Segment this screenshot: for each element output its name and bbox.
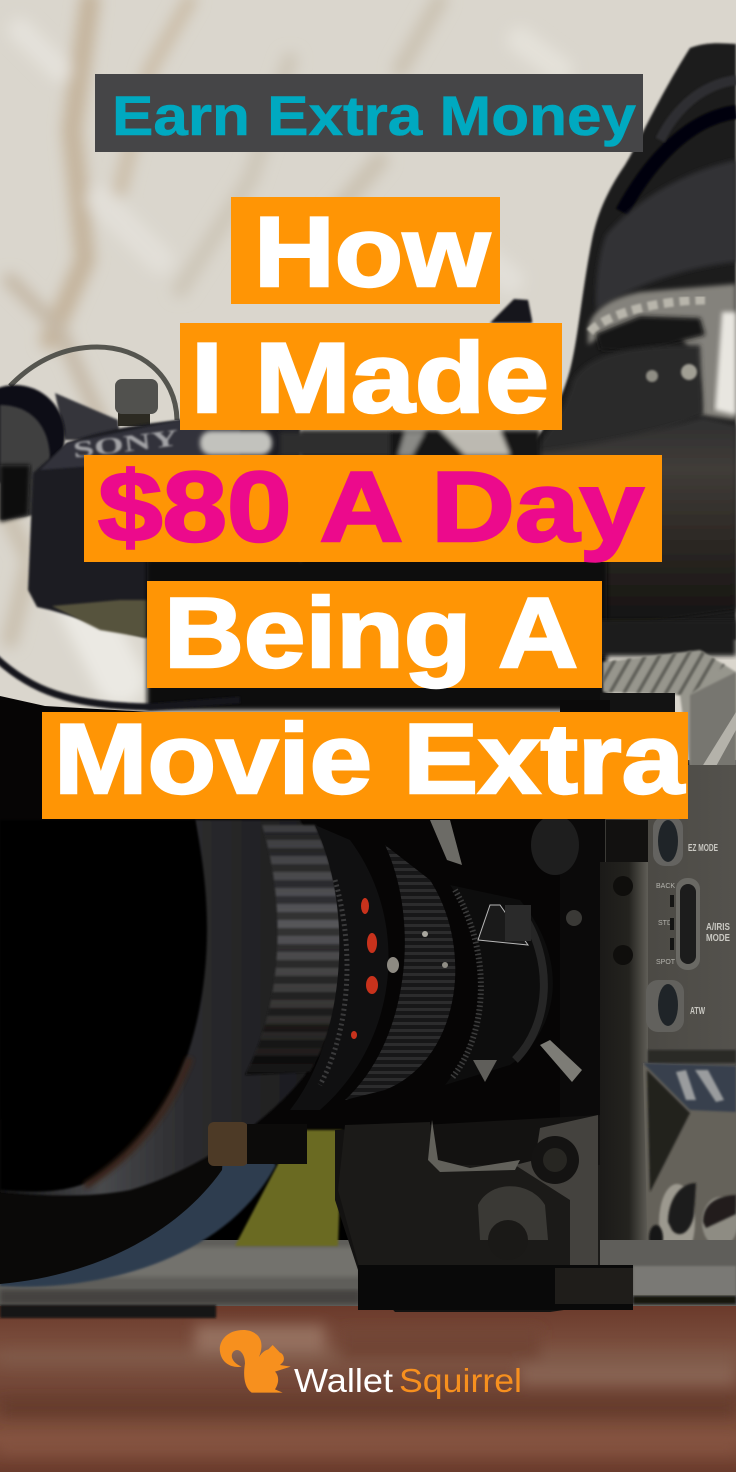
olive background patch [235, 1130, 342, 1246]
wordmark: Wallet [294, 1362, 393, 1399]
main lens assembly [0, 815, 582, 1196]
cable loop [10, 347, 177, 420]
collar shadow and dark housing [530, 345, 703, 455]
blurred wall backdrop [0, 0, 736, 760]
switch labels: SPOT L [656, 959, 681, 966]
blue camera bag curve [0, 1140, 276, 1287]
dark mass behind main lens [0, 696, 605, 1160]
table surface [0, 1240, 736, 1312]
subtitle banner: Earn Extra Money [95, 74, 643, 152]
screws [613, 876, 633, 965]
headline line: $80 A Day: $80 A Day [98, 451, 644, 562]
dark strip under vents [600, 693, 675, 713]
rear arm [55, 393, 120, 440]
eyepiece and viewfinder, upper right [526, 43, 736, 640]
rubber eye cup folds [622, 80, 736, 212]
dark ring and cylinder [0, 385, 65, 485]
dark body band between the plates [600, 620, 736, 656]
switch labels: STD [658, 920, 672, 927]
button: ATW [646, 980, 705, 1032]
red distance marks [351, 898, 378, 1039]
blurred camera top behind headline [147, 430, 607, 710]
base mount under the lens [335, 1115, 633, 1312]
headline line: Movie Extra: Movie Extra [54, 703, 685, 814]
silver collar with teeth [588, 284, 736, 420]
logo: Wallet Squirrel [220, 1330, 393, 1399]
A/IRIS switch [676, 878, 730, 970]
front lens hood [0, 820, 336, 1196]
ribbed barrel [245, 825, 341, 1075]
main handle body [28, 415, 300, 640]
A/IRIS switch: MODE [706, 933, 730, 944]
headline line: Being A: Being A [164, 577, 578, 688]
subtitle banner: Earn Extra Money: Earn Extra Money [112, 84, 636, 147]
black lower lens body [0, 1130, 225, 1284]
lens glass [0, 820, 207, 1192]
right camera body panel [600, 765, 736, 1275]
button: EZ mode [653, 816, 718, 866]
top ring [430, 820, 462, 865]
toothed zoom ring [345, 845, 455, 1100]
switch labels [656, 883, 681, 966]
knurled thumb screw [115, 379, 158, 426]
SONY label: SONY [72, 425, 180, 463]
olive underside of handle [52, 600, 147, 638]
black focus ring with red marks [290, 825, 399, 1110]
small knurled knob behind the title [490, 299, 532, 323]
headline line: How: How [254, 196, 491, 307]
button: ATW: ATW [690, 1006, 705, 1017]
pale gap next to the collar [500, 430, 534, 453]
rear iris rings [445, 885, 553, 1085]
cable on left edge [0, 657, 240, 707]
icon: squirrel [220, 1330, 291, 1393]
wordmark accent: Squirrel: Squirrel [399, 1362, 522, 1399]
lower control panel [643, 1050, 736, 1265]
camera handle with SONY badge [0, 347, 300, 640]
lens screws [473, 910, 582, 1082]
brown body below viewfinder [527, 417, 736, 624]
wooden table front [0, 1305, 736, 1472]
A/IRIS switch: A/IRIS [706, 922, 730, 933]
switch labels: BACK L [656, 883, 681, 890]
silver vent plate [603, 650, 736, 770]
button: EZ mode: EZ MODE [688, 843, 718, 854]
brass rod clamp [208, 1122, 307, 1166]
headline line: I Made: I Made [191, 322, 549, 433]
